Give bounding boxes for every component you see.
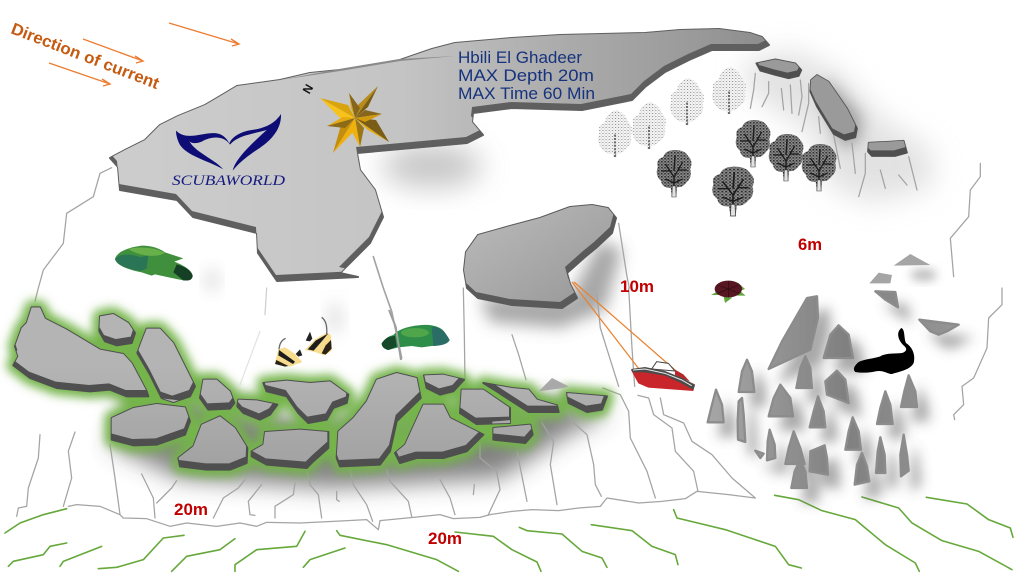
compass rose <box>320 86 389 153</box>
site info text: Hbili El Ghadeer <box>458 49 583 67</box>
soft shadows of the islands <box>205 50 932 334</box>
mooring lines <box>572 282 675 370</box>
depth label 20m right: 20m <box>428 529 462 548</box>
rock tops <box>12 301 606 463</box>
boat with mooring lines <box>572 282 695 391</box>
depth label 10m: 10m <box>620 277 654 296</box>
site info text: MAX Time 60 Min <box>458 85 595 103</box>
current arrows <box>49 23 239 86</box>
white sea fans <box>598 67 746 157</box>
bannerfish upper <box>305 317 332 355</box>
boat <box>631 362 695 391</box>
pale rock <box>539 378 569 391</box>
bannerfish pair <box>275 317 332 367</box>
north marker: N <box>300 82 316 96</box>
main island <box>109 23 769 281</box>
wrasse fish left <box>115 246 193 281</box>
site info text: MAX Depth 20m <box>458 67 594 85</box>
depth label 20m left: 20m <box>174 500 208 519</box>
depth label 6m: 6m <box>798 235 822 254</box>
upper small pinnacles <box>869 254 937 283</box>
wrasse fish right <box>382 310 450 360</box>
contour lines <box>17 73 1002 530</box>
logo wordmark: SCUBAWORLD <box>172 173 285 189</box>
turtle <box>711 281 746 303</box>
reef shadow <box>10 345 610 488</box>
moray eel <box>854 328 914 374</box>
site info text <box>458 49 595 103</box>
small island <box>462 199 616 308</box>
pinnacles <box>708 291 970 501</box>
northeast rocks <box>755 54 907 156</box>
rock bases <box>13 307 607 470</box>
direction of current label: Direction of current <box>9 20 162 93</box>
dark sea fans <box>657 120 836 216</box>
bannerfish lower <box>275 338 302 367</box>
reef: rocks with green glow <box>12 301 607 470</box>
green sea-floor lines <box>5 495 1013 571</box>
green algae glow <box>13 307 607 470</box>
pinnacle shadows <box>719 305 970 501</box>
pinnacle shapes <box>708 291 959 488</box>
logo: whale tail <box>176 114 281 171</box>
